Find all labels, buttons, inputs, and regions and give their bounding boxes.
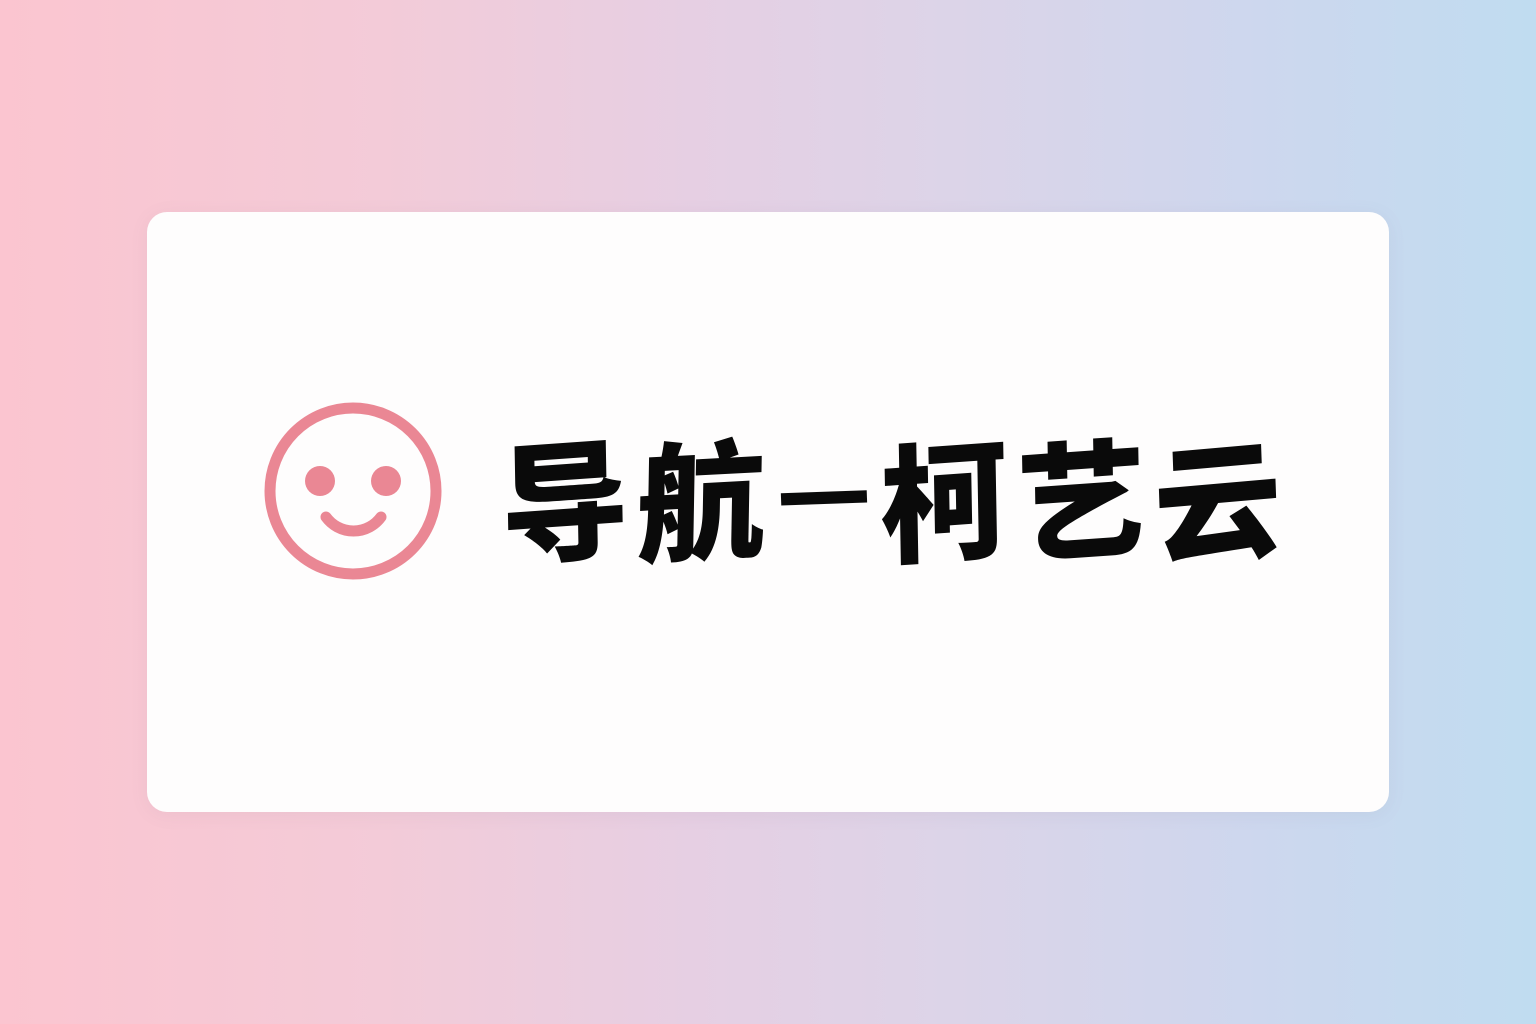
title xyxy=(500,429,1284,584)
title: 柯 xyxy=(879,430,1009,583)
title: 云 xyxy=(1152,429,1284,584)
icon: left eye xyxy=(305,466,335,496)
icon: right eye xyxy=(371,466,401,496)
title: 航 xyxy=(636,430,766,581)
icon: face outline xyxy=(270,408,436,574)
icon: smiley face xyxy=(264,402,442,580)
title: 艺 xyxy=(1016,429,1146,582)
panel: white card xyxy=(147,212,1389,812)
icon: smile xyxy=(326,517,381,531)
title: 导 xyxy=(500,430,630,583)
title: 一 xyxy=(776,457,872,546)
